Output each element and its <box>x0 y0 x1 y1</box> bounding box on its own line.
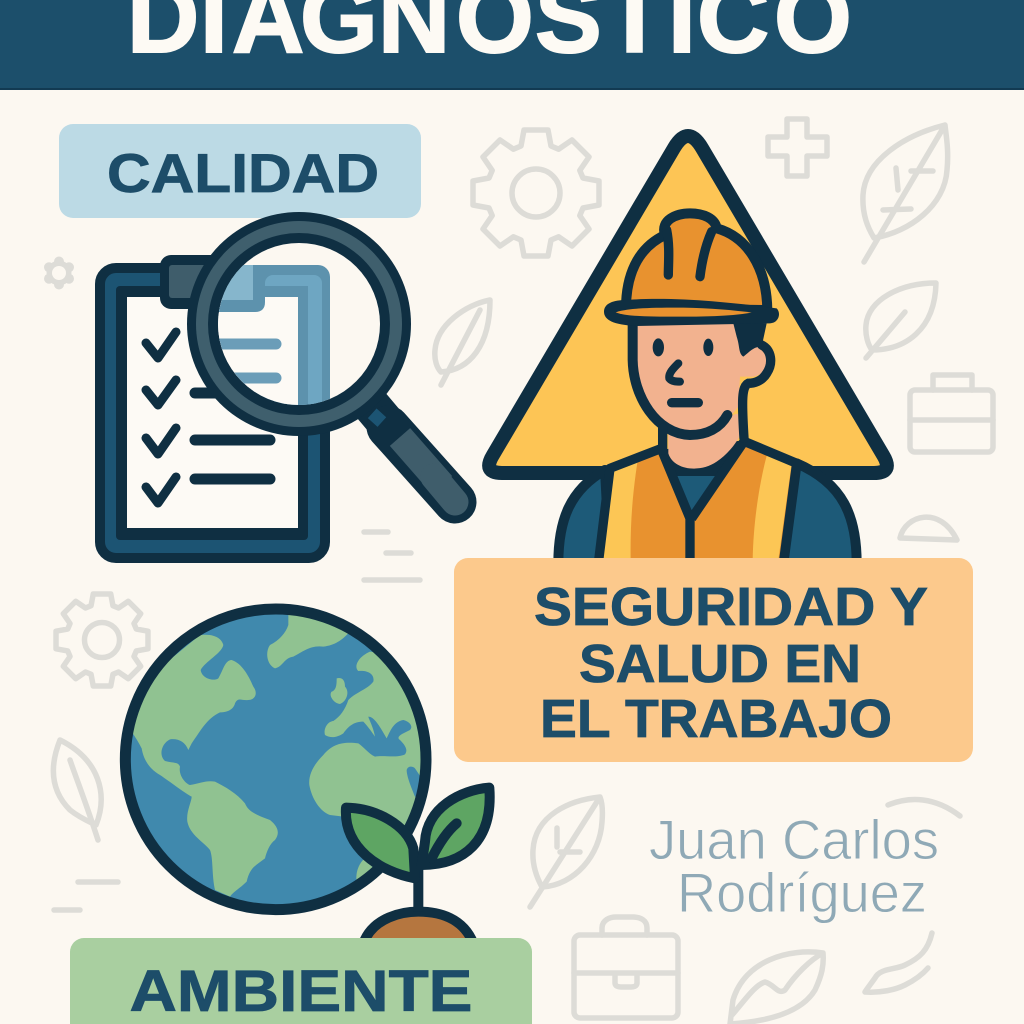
icon: checklist clipboard <box>100 255 325 558</box>
label: ambiente: AMBIENTE <box>130 959 472 1024</box>
label: seguridad y salud en el trabajo <box>454 558 973 762</box>
icon: warning triangle <box>489 136 887 473</box>
author name: Juan Carlos <box>649 808 939 871</box>
icon: seedling <box>346 788 490 943</box>
label: seguridad y salud en el trabajo: SEGURIDAD Y <box>534 577 928 637</box>
icon: globe <box>125 608 490 943</box>
header band <box>0 0 1024 90</box>
label: seguridad y salud en el trabajo: EL TRABAJO <box>540 689 892 749</box>
label: calidad: CALIDAD <box>107 142 379 204</box>
label: seguridad y salud en el trabajo: SALUD EN <box>579 634 861 694</box>
label: ambiente <box>70 938 532 1024</box>
author name <box>649 808 939 924</box>
icon: magnifying glass <box>187 212 455 502</box>
icon: construction worker <box>558 213 857 563</box>
author name: Rodríguez <box>677 861 927 924</box>
label: calidad <box>59 124 421 218</box>
